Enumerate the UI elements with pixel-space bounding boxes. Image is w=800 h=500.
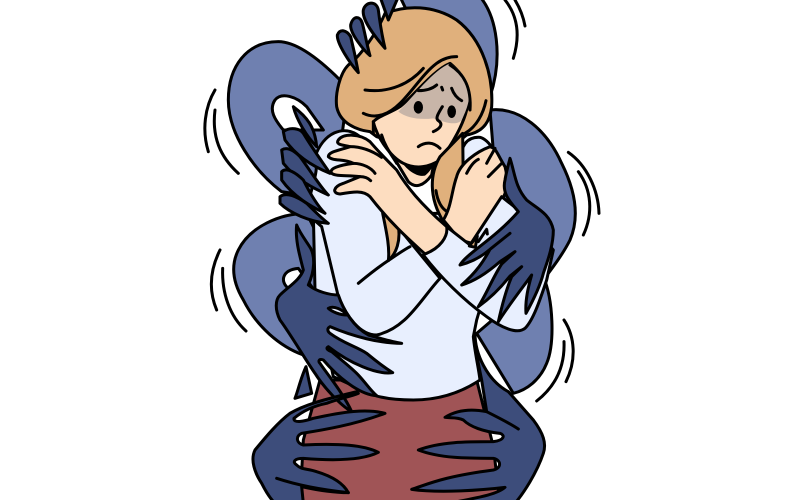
face (373, 63, 469, 176)
sleeve cuff details (469, 229, 487, 247)
hair front strands (363, 57, 486, 133)
shadow hand on top of head (337, 0, 398, 73)
arm and hand on left shoulder (328, 135, 447, 254)
white sweater: torso (313, 207, 510, 400)
sleeve crease (358, 247, 410, 283)
shadow hand on right hip (412, 333, 545, 500)
hair, back (336, 8, 492, 157)
sweater: front sleeve (423, 197, 553, 331)
neck (393, 157, 435, 186)
shadow fingers on left shoulder (280, 107, 330, 223)
shadow hand on right sleeve (460, 158, 553, 322)
shadow hand on left arm (276, 225, 402, 412)
arm and hand on right shoulder (443, 147, 507, 243)
shadow hand on left hip (253, 392, 385, 500)
motion lines (205, 0, 599, 401)
hair lock below the arm (383, 213, 399, 261)
right shoulder (461, 137, 500, 200)
red skirt (300, 380, 500, 500)
small claw at waist (295, 367, 312, 398)
long hair strand at right of neck (432, 133, 463, 222)
shadow tentacles behind the woman (228, 0, 575, 393)
sweater: crossed upper arm (307, 131, 440, 335)
